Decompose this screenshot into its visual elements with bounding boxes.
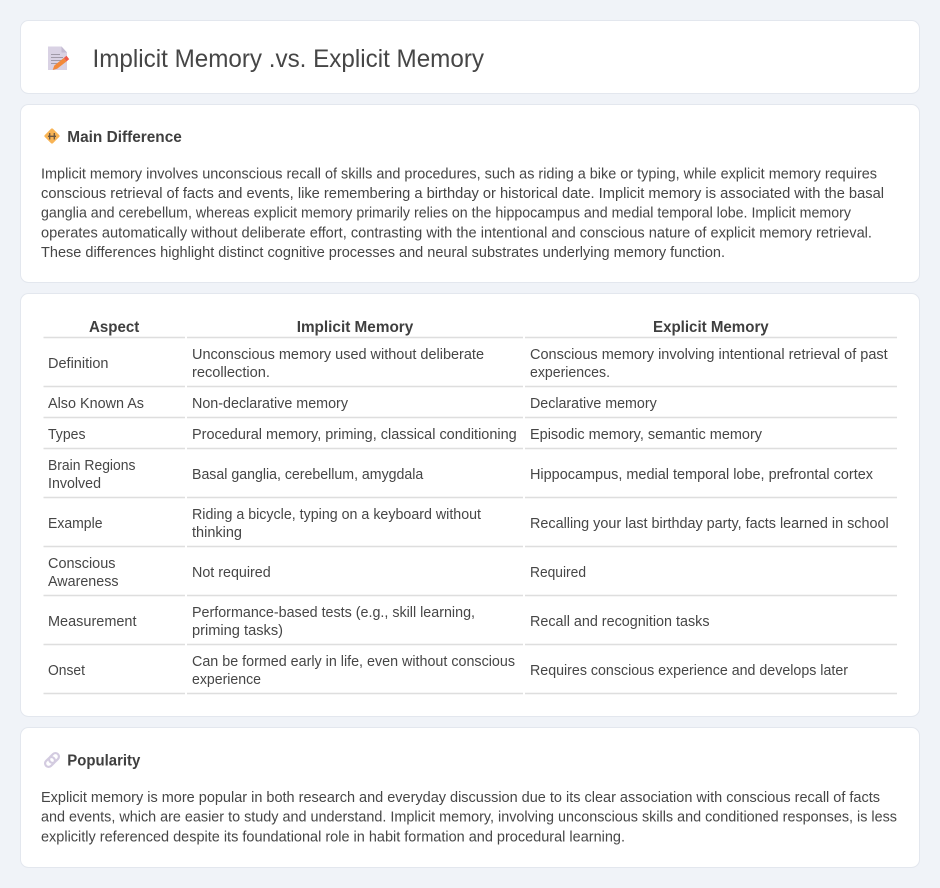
row: types: Types bbox=[48, 427, 86, 443]
text block: main difference bbox=[41, 166, 884, 261]
row: conscious awareness: Awareness bbox=[48, 574, 118, 590]
table header row: Explicit Memory bbox=[653, 319, 769, 336]
row: definition: Definition bbox=[48, 356, 108, 372]
row: definition bbox=[48, 347, 888, 381]
table header row: Aspect bbox=[89, 319, 140, 336]
icon: chain link bbox=[44, 752, 60, 768]
text block: main difference: operates automatically without deliberate effort, contrasting with the intentional and conscious nature of explicit memory retrieval. bbox=[41, 225, 872, 241]
row: types bbox=[48, 427, 763, 443]
panel: main difference bbox=[20, 104, 920, 282]
row: measurement: Measurement bbox=[48, 614, 136, 630]
row: also known as bbox=[48, 396, 657, 412]
row: example bbox=[48, 507, 889, 541]
row: brain regions involved: Involved bbox=[48, 476, 101, 492]
row: also known as: Also Known As bbox=[48, 396, 144, 412]
row: example: Example bbox=[48, 516, 102, 532]
table header row bbox=[89, 319, 769, 336]
title: Implicit Memory .vs. Explicit Memory bbox=[92, 45, 484, 73]
icon: warning diamond bbox=[44, 128, 60, 144]
text block: popularity: and events, which are easier to study and understand. Implicit memory, involving unconscious skills and conditioned responses, is less bbox=[41, 810, 897, 826]
text block: main difference: conscious retrieval of facts and events, like remembering a birthday or historical date. Implicit memory is associated with the basal bbox=[41, 186, 884, 202]
row: types: Procedural memory, priming, classical conditioning bbox=[192, 427, 517, 443]
table header row: Implicit Memory bbox=[297, 319, 413, 336]
row: conscious awareness: Not required bbox=[192, 565, 271, 581]
text block: main difference: ganglia and cerebellum, whereas explicit memory primarily relies on the hippocampus and medial temporal lobe. Implicit memory bbox=[41, 206, 852, 222]
row: brain regions involved: Hippocampus, medial temporal lobe, prefrontal cortex bbox=[530, 467, 874, 483]
row: definition: Unconscious memory used without deliberate bbox=[192, 347, 484, 363]
row: types: Episodic memory, semantic memory bbox=[530, 427, 763, 443]
row: brain regions involved bbox=[48, 458, 874, 492]
row: brain regions involved: Brain Regions bbox=[48, 458, 136, 474]
row: conscious awareness: Required bbox=[530, 565, 586, 581]
text block: main difference: These differences highlight distinct cognitive processes and neural substrates underlying memory function. bbox=[41, 245, 725, 261]
row: onset bbox=[48, 654, 848, 688]
panel: header bbox=[20, 20, 920, 94]
row: also known as: Declarative memory bbox=[530, 396, 657, 412]
row: also known as: Non-declarative memory bbox=[192, 396, 349, 412]
row: onset: Can be formed early in life, even without conscious bbox=[192, 654, 515, 670]
row: onset: Onset bbox=[48, 663, 85, 679]
panel: popularity bbox=[20, 728, 920, 868]
row: conscious awareness: Conscious bbox=[48, 556, 116, 572]
row: measurement: priming tasks) bbox=[192, 623, 283, 639]
row: example: Riding a bicycle, typing on a keyboard without bbox=[192, 507, 481, 523]
row: conscious awareness bbox=[48, 556, 586, 590]
row: onset: experience bbox=[192, 672, 261, 688]
row: measurement bbox=[48, 605, 710, 639]
row: definition: recollection. bbox=[192, 365, 270, 381]
heading: main difference: Main Difference bbox=[67, 129, 182, 146]
row: definition: experiences. bbox=[530, 365, 610, 381]
text block: main difference: Implicit memory involves unconscious recall of skills and procedures, such as riding a bike or typing, while explicit memory requires bbox=[41, 166, 877, 182]
row: example: thinking bbox=[192, 525, 242, 541]
heading: popularity: Popularity bbox=[67, 752, 140, 770]
row: example: Recalling your last birthday party, facts learned in school bbox=[530, 516, 889, 532]
row: measurement: Performance-based tests (e.g., skill learning, bbox=[192, 605, 475, 621]
row: definition: Conscious memory involving intentional retrieval of past bbox=[530, 347, 888, 363]
row: onset: Requires conscious experience and develops later bbox=[530, 663, 848, 679]
text block: popularity: Explicit memory is more popular in both research and everyday discussion due to its clear association with conscious recall of facts bbox=[41, 790, 880, 806]
row: measurement: Recall and recognition tasks bbox=[530, 614, 710, 630]
panel: comparison table bbox=[20, 294, 920, 716]
row: brain regions involved: Basal ganglia, cerebellum, amygdala bbox=[192, 467, 423, 483]
text block: popularity bbox=[41, 790, 897, 845]
text block: popularity: explicitly referenced despite its foundational role in habit formation and procedural learning. bbox=[41, 829, 625, 845]
icon: document with pencil bbox=[48, 46, 69, 70]
